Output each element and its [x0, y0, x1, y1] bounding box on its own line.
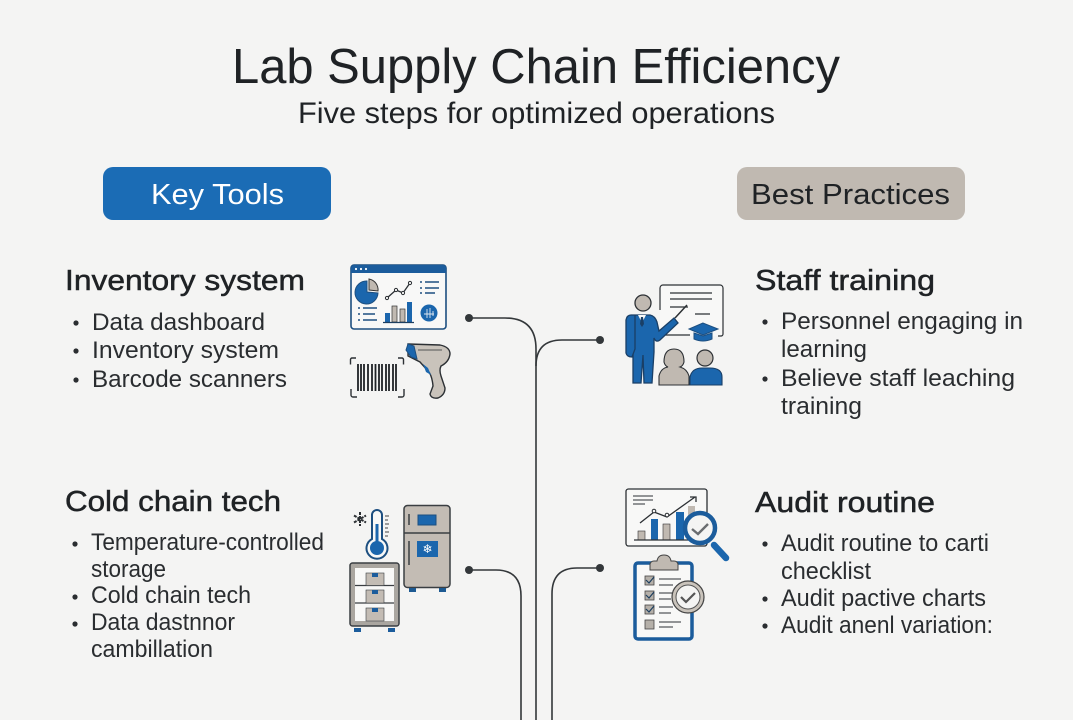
icon: barcode — [350, 358, 404, 397]
icon: data dashboard — [351, 265, 446, 329]
heading: staff training: Staff training — [755, 265, 935, 297]
list: audit routine: Audit anenl variation: — [781, 612, 993, 639]
connector: staff training — [536, 340, 600, 366]
icon: refrigerator: ❄ — [422, 542, 433, 556]
list: audit routine: Audit routine to carti — [781, 530, 989, 557]
list: staff training: Believe staff leaching — [781, 365, 1015, 392]
list: cold chain tech: Temperature-controlled — [91, 529, 324, 556]
icon: barcode scanner — [406, 344, 450, 398]
panel header: best practices — [737, 167, 965, 220]
list: staff training: learning — [781, 336, 867, 363]
subtitle: Five steps for optimized operations — [298, 97, 775, 130]
connector dots — [465, 314, 604, 574]
list: audit routine — [762, 530, 993, 639]
connector: inventory system — [469, 318, 536, 720]
list: cold chain tech: storage — [91, 556, 166, 583]
list: staff training — [762, 308, 1023, 420]
icon: chart with magnifier — [626, 489, 726, 558]
list: inventory system: Barcode scanners — [92, 366, 287, 393]
list: inventory system — [73, 309, 287, 393]
panel header: key tools — [103, 167, 331, 220]
list: inventory system: Data dashboard — [92, 309, 265, 336]
icon: thermometer — [354, 510, 389, 559]
icon: refrigerator — [404, 506, 450, 592]
panel header: key tools: Key Tools — [151, 179, 284, 211]
heading: cold chain tech: Cold chain tech — [65, 486, 281, 518]
connector: audit routine — [552, 568, 600, 720]
panel: audit routine — [755, 487, 993, 639]
list: cold chain tech: Data dastnnor — [91, 609, 235, 636]
heading: audit routine: Audit routine — [755, 487, 935, 519]
panel: cold chain tech — [65, 486, 324, 663]
list: inventory system: Inventory system — [92, 337, 279, 364]
icon: staff trainer with audience — [626, 285, 723, 385]
title: Lab Supply Chain Efficiency — [232, 40, 840, 94]
panel header: best practices: Best Practices — [751, 179, 950, 211]
panel: inventory system — [65, 265, 305, 393]
list: cold chain tech — [72, 529, 324, 663]
icon: storage cabinet — [350, 563, 399, 632]
list: staff training: Personnel engaging in — [781, 308, 1023, 335]
list: cold chain tech: cambillation — [91, 636, 213, 663]
list: staff training: training — [781, 393, 862, 420]
list: audit routine: checklist — [781, 558, 871, 585]
heading: inventory system: Inventory system — [65, 265, 305, 297]
panel: staff training — [755, 265, 1023, 420]
icon: clipboard checklist — [635, 555, 704, 639]
list: cold chain tech: Cold chain tech — [91, 582, 251, 609]
connector: cold chain tech — [469, 570, 521, 720]
list: audit routine: Audit pactive charts — [781, 585, 986, 612]
